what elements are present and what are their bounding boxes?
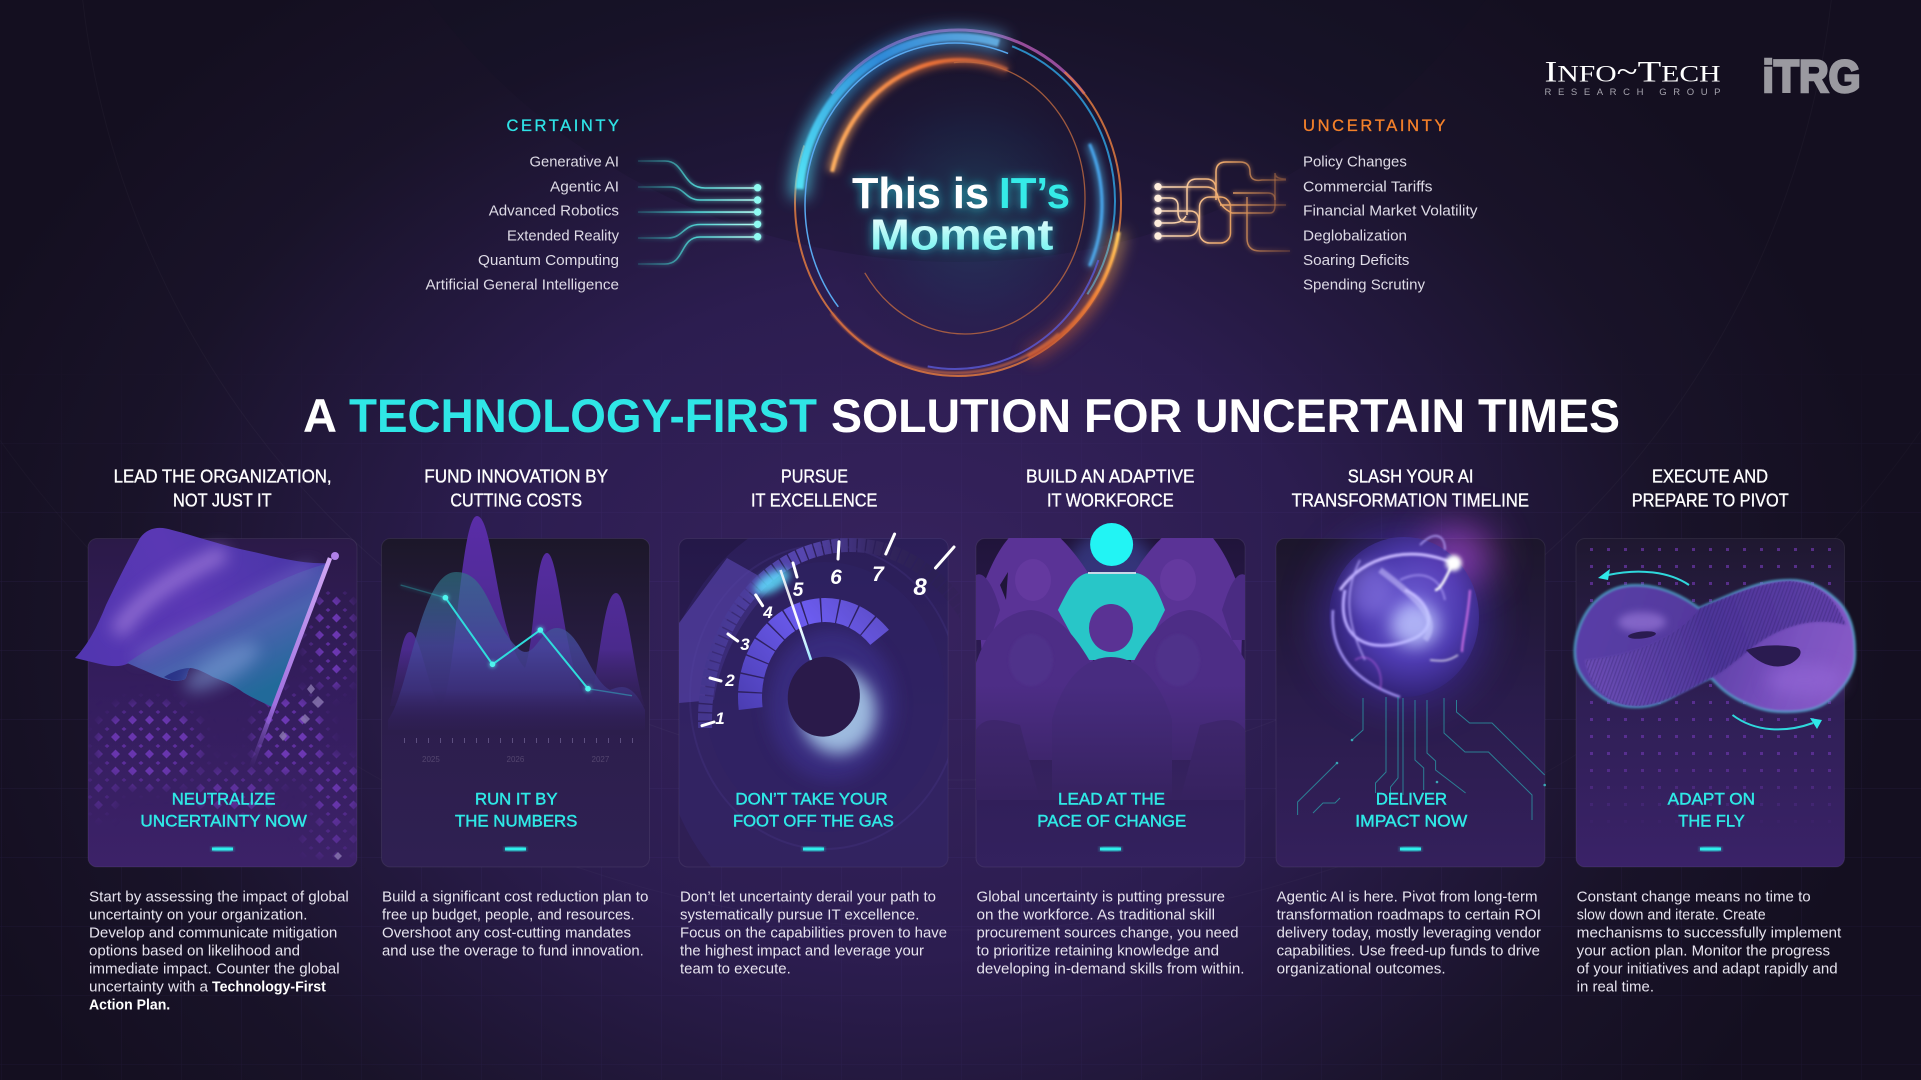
heading — [424, 466, 608, 511]
accent dash — [1700, 848, 1721, 850]
uncertainty items: Deglobalization — [1303, 228, 1407, 245]
subtitle — [1355, 790, 1467, 831]
body text: uncertainty on your organization. — [89, 908, 307, 924]
heading: FUND INNOVATION BY — [424, 466, 608, 487]
panel: card 5 AI transformation — [1276, 466, 1546, 978]
card background — [679, 538, 948, 867]
logo: ITRG: iTRG — [1762, 51, 1860, 102]
card background — [976, 538, 1245, 867]
certainty items: Advanced Robotics — [489, 203, 619, 220]
body text: on the workforce. As traditional skill — [976, 908, 1215, 924]
card background — [1576, 538, 1844, 867]
panel: card 1 lead the organization — [75, 466, 357, 1014]
headline: This is IT's Moment: Moment — [870, 210, 1054, 259]
card background — [382, 538, 650, 867]
body text — [1277, 890, 1541, 978]
cyan connector lines — [638, 161, 761, 264]
subtitle: NEUTRALIZE — [172, 790, 276, 809]
uncertainty items: Policy Changes — [1303, 154, 1407, 171]
heading: IT EXCELLENCE — [751, 490, 877, 511]
heading: SLASH YOUR AI — [1348, 466, 1474, 487]
uncertainty items: Commercial Tariffs — [1303, 179, 1433, 196]
main title — [303, 389, 1620, 442]
certainty items: Agentic AI — [550, 179, 619, 196]
subtitle: IMPACT NOW — [1355, 812, 1467, 831]
panel: card 3 pursue IT excellence — [678, 469, 956, 974]
body text: delivery today, mostly leveraging vendor — [1277, 926, 1541, 942]
circuit traces — [1298, 697, 1546, 820]
heading: PURSUE — [781, 466, 848, 487]
gauge numbers: 6 — [830, 566, 842, 589]
diamond pattern — [88, 590, 357, 860]
accent dash — [1100, 848, 1121, 850]
heading — [1292, 466, 1529, 511]
chart: area peaks and trend line — [382, 516, 649, 764]
headline: This is IT's Moment — [852, 169, 1070, 259]
heading: IT WORKFORCE — [1047, 490, 1174, 511]
heading: TRANSFORMATION TIMELINE — [1292, 490, 1529, 511]
body text — [382, 890, 648, 960]
heading: NOT JUST IT — [173, 490, 272, 511]
headline: This is IT's Moment: This is — [852, 169, 989, 218]
panel: card 6 execute and pivot — [1575, 466, 1855, 996]
subtitle: FOOT OFF THE GAS — [733, 812, 894, 831]
body text: Develop and communicate mitigation — [89, 926, 337, 942]
gauge numbers: 2 — [724, 671, 735, 690]
heading — [1632, 466, 1789, 511]
subtitle — [1668, 790, 1755, 831]
gauge numbers: 5 — [793, 580, 804, 601]
body text: of your initiatives and adapt rapidly and — [1577, 962, 1838, 978]
subtitle — [140, 790, 307, 831]
icon: infinity loop — [1575, 580, 1855, 712]
icon: waving flag — [75, 528, 339, 767]
certainty items: Quantum Computing — [478, 252, 619, 269]
panel: card 4 adaptive workforce — [974, 466, 1250, 978]
body text: the highest impact and leverage your — [680, 944, 924, 960]
heading: EXECUTE AND — [1652, 466, 1768, 487]
gauge numbers: 8 — [913, 574, 927, 601]
certainty items — [426, 154, 619, 293]
uncertainty heading: UNCERTAINTY — [1303, 117, 1446, 135]
main title: SOLUTION FOR UNCERTAIN TIMES — [831, 389, 1620, 442]
body text: Technology-First — [212, 980, 326, 996]
gauge numbers: 4 — [762, 603, 773, 622]
accent dash — [505, 848, 526, 850]
body text — [1577, 890, 1841, 996]
body text: procurement sources change, you need — [976, 926, 1238, 942]
gauge numbers: 3 — [740, 635, 750, 654]
body text: options based on likelihood and — [89, 944, 300, 960]
panel: central ring — [795, 30, 1121, 376]
gauge numbers: 7 — [872, 563, 885, 586]
body text — [89, 890, 349, 1014]
body text: Start by assessing the impact of global — [89, 890, 349, 906]
subtitle — [733, 790, 894, 831]
body text: free up budget, people, and resources. — [382, 908, 635, 924]
body text: Constant change means no time to — [1577, 890, 1811, 906]
body text: mechanisms to successfully implement — [1577, 926, 1841, 942]
heading — [114, 466, 332, 511]
body text: Overshoot any cost-cutting mandates — [382, 926, 631, 942]
body text — [976, 890, 1244, 978]
subtitle — [455, 790, 577, 831]
body text: to prioritize retaining knowledge and — [976, 944, 1219, 960]
subtitle: UNCERTAINTY NOW — [140, 812, 307, 831]
body text: transformation roadmaps to certain ROI — [1277, 908, 1541, 924]
icon: crowd with highlighted leader — [974, 520, 1250, 800]
body text: Don’t let uncertainty derail your path to — [680, 890, 936, 906]
accent dash — [1400, 848, 1421, 850]
subtitle: THE FLY — [1678, 812, 1745, 831]
gauge numbers — [715, 563, 927, 728]
body text: slow down and iterate. Create — [1577, 908, 1766, 924]
chart: area peaks and trend line: 2026 — [506, 755, 525, 764]
subtitle: LEAD AT THE — [1058, 790, 1165, 809]
uncertainty items — [1303, 154, 1478, 293]
certainty heading: CERTAINTY — [506, 117, 619, 135]
orange tangled connector lines — [1154, 162, 1290, 251]
headline: This is IT's Moment: IT’s — [999, 169, 1070, 218]
body text: your action plan. Monitor the progress — [1577, 944, 1830, 960]
main title: A — [303, 389, 337, 442]
heading: BUILD AN ADAPTIVE — [1026, 466, 1195, 487]
body text: and use the overage to fund innovation. — [382, 944, 644, 960]
body text: capabilities. Use freed-up funds to drive — [1277, 944, 1540, 960]
gauge numbers: 1 — [715, 709, 725, 728]
body text: uncertainty with a — [89, 980, 209, 996]
heading — [1026, 466, 1195, 511]
heading — [751, 466, 877, 511]
arrow: top counter-clockwise — [1598, 569, 1689, 585]
body text: in real time. — [1577, 980, 1654, 996]
gauge ticks — [702, 534, 954, 726]
heading: CUTTING COSTS — [450, 490, 582, 511]
body text: Action Plan. — [89, 998, 170, 1014]
body text: Build a significant cost reduction plan to — [382, 890, 648, 906]
panel: certainty list — [426, 117, 761, 293]
uncertainty items: Financial Market Volatility — [1303, 203, 1478, 220]
panel: card 2 fund innovation — [382, 466, 650, 960]
logo: Info-Tech Research Group: RESEARCH GROUP — [1544, 87, 1720, 98]
body text: organizational outcomes. — [1277, 962, 1446, 978]
body text: immediate impact. Counter the global — [89, 962, 340, 978]
body text: developing in-demand skills from within. — [976, 962, 1244, 978]
uncertainty items: Spending Scrutiny — [1303, 276, 1425, 293]
subtitle: RUN IT BY — [475, 790, 558, 809]
accent dash — [212, 848, 233, 850]
arrow: bottom clockwise — [1732, 715, 1822, 729]
body text: Global uncertainty is putting pressure — [976, 890, 1225, 906]
certainty items: Artificial General Intelligence — [426, 276, 619, 293]
body text — [680, 890, 947, 978]
icon: plasma sphere — [1320, 525, 1494, 705]
icon: speedometer gauge — [679, 532, 956, 866]
accent dash — [803, 848, 824, 850]
logo: Info-Tech Research Group: INFO ~T ECH — [1544, 56, 1720, 88]
card background — [1276, 538, 1545, 867]
chart: area peaks and trend line: 2025 — [422, 755, 440, 764]
subtitle: DELIVER — [1376, 790, 1447, 809]
uncertainty items: Soaring Deficits — [1303, 252, 1410, 269]
chart: area peaks and trend line: 2027 — [592, 755, 610, 764]
heading: PREPARE TO PIVOT — [1632, 490, 1789, 511]
main title: TECHNOLOGY-FIRST — [349, 389, 817, 442]
subtitle: DON’T TAKE YOUR — [735, 790, 888, 809]
subtitle — [1037, 790, 1186, 831]
certainty items: Extended Reality — [507, 228, 619, 245]
subtitle: THE NUMBERS — [455, 812, 577, 831]
body text: Agentic AI is here. Pivot from long-term — [1277, 890, 1538, 906]
panel: uncertainty list — [1154, 117, 1478, 293]
body text: Focus on the capabilities proven to have — [680, 926, 947, 942]
subtitle: ADAPT ON — [1668, 790, 1755, 809]
body text: team to execute. — [680, 962, 791, 978]
certainty items: Generative AI — [530, 154, 619, 171]
card background — [88, 538, 357, 867]
body text: systematically pursue IT excellence. — [680, 908, 919, 924]
subtitle: PACE OF CHANGE — [1037, 812, 1186, 831]
dot grid — [1590, 548, 1831, 806]
heading: LEAD THE ORGANIZATION, — [114, 466, 332, 487]
